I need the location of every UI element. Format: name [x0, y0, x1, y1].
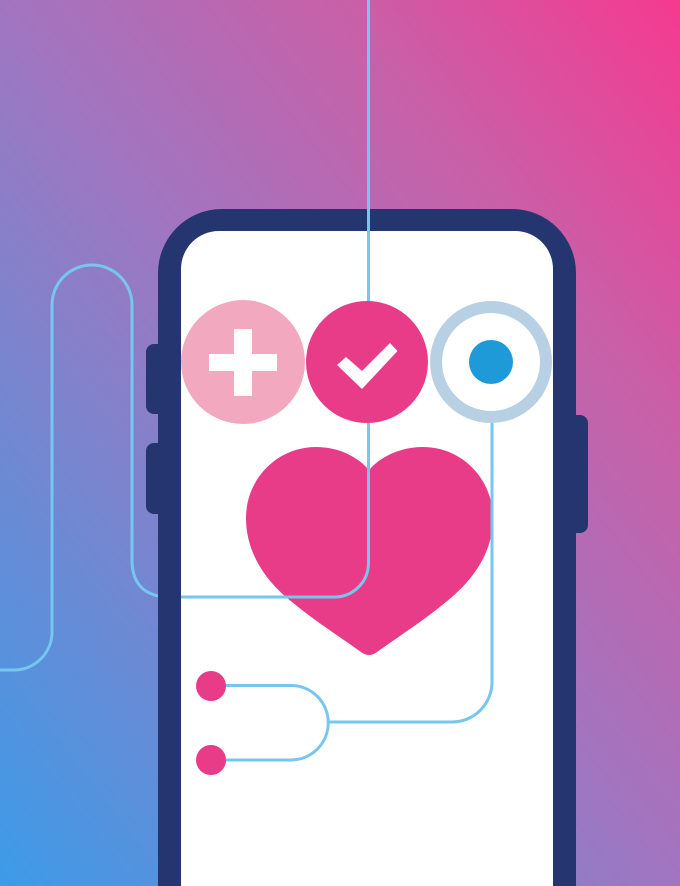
line: stethoscope fork: [212, 686, 328, 760]
phone body: [158, 209, 576, 886]
record button: [436, 307, 546, 417]
stethoscope tips: [196, 671, 226, 775]
phone side buttons: [146, 344, 588, 533]
check button: [306, 301, 428, 423]
connector lines: [181, 0, 492, 760]
plus button: [181, 300, 305, 424]
line: top cable into heart: [181, 0, 368, 597]
heart: [246, 447, 493, 655]
line: left looping cable: [0, 265, 158, 670]
phone screen: [181, 231, 553, 886]
line: stethoscope cable: [329, 422, 492, 722]
